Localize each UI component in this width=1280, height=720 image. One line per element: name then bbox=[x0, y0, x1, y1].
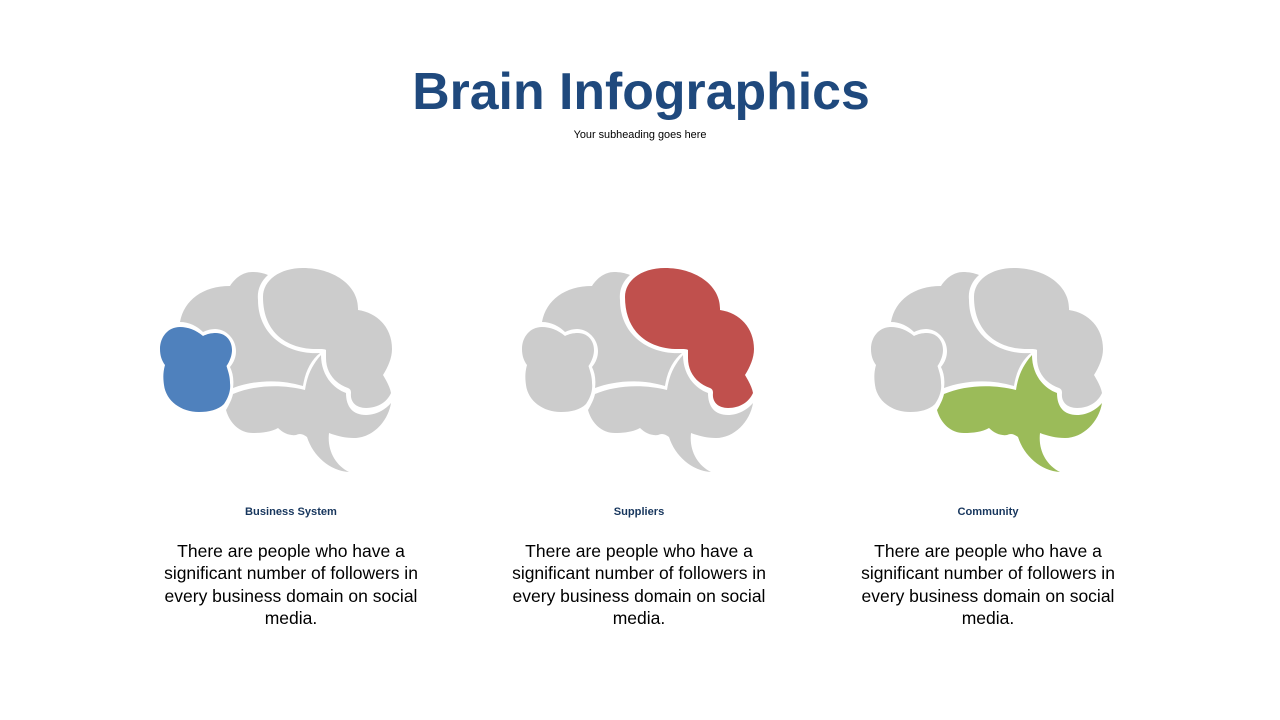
brain lobe: lower bbox=[588, 355, 753, 472]
brain lobe: green bbox=[937, 355, 1102, 472]
description: business system: every business domain on social bbox=[165, 586, 417, 606]
subtitle: Your subheading goes here bbox=[574, 129, 706, 141]
brain lobe: parietal bbox=[180, 272, 320, 388]
description: suppliers: media. bbox=[613, 608, 665, 628]
description: suppliers: significant number of followers in bbox=[512, 563, 766, 583]
label: suppliers: Suppliers bbox=[614, 506, 664, 518]
description: suppliers: There are people who have a bbox=[525, 541, 753, 561]
description: suppliers bbox=[512, 541, 766, 628]
brain lobe: blue bbox=[160, 327, 232, 412]
description: community: media. bbox=[962, 608, 1014, 628]
description: community: every business domain on social bbox=[862, 586, 1114, 606]
title: Brain Infographics bbox=[412, 62, 870, 120]
description: community bbox=[861, 541, 1115, 628]
brain lobe: red bbox=[625, 268, 754, 408]
brain lobe: frontal bbox=[871, 327, 943, 412]
brain lobe: lower bbox=[226, 355, 391, 472]
description: business system: There are people who have a bbox=[177, 541, 405, 561]
brain lobe: parietal bbox=[891, 272, 1031, 388]
description: business system bbox=[164, 541, 418, 628]
brain lobe: frontal bbox=[522, 327, 594, 412]
brain lobe: upper right bbox=[263, 268, 392, 408]
label: community: Community bbox=[957, 506, 1018, 518]
brain icon: business system (frontal lobe highlighted blue) bbox=[160, 268, 392, 472]
label: business system: Business System bbox=[245, 506, 337, 518]
brain icon: community (lower lobe highlighted green) bbox=[871, 268, 1103, 472]
description: suppliers: every business domain on social bbox=[513, 586, 765, 606]
brain icon: suppliers (upper right lobe highlighted red) bbox=[522, 268, 754, 472]
brain lobe: upper right bbox=[974, 268, 1103, 408]
brain lobe: parietal bbox=[542, 272, 682, 388]
description: business system: significant number of followers in bbox=[164, 563, 418, 583]
description: community: significant number of followers in bbox=[861, 563, 1115, 583]
description: community: There are people who have a bbox=[874, 541, 1102, 561]
description: business system: media. bbox=[265, 608, 317, 628]
